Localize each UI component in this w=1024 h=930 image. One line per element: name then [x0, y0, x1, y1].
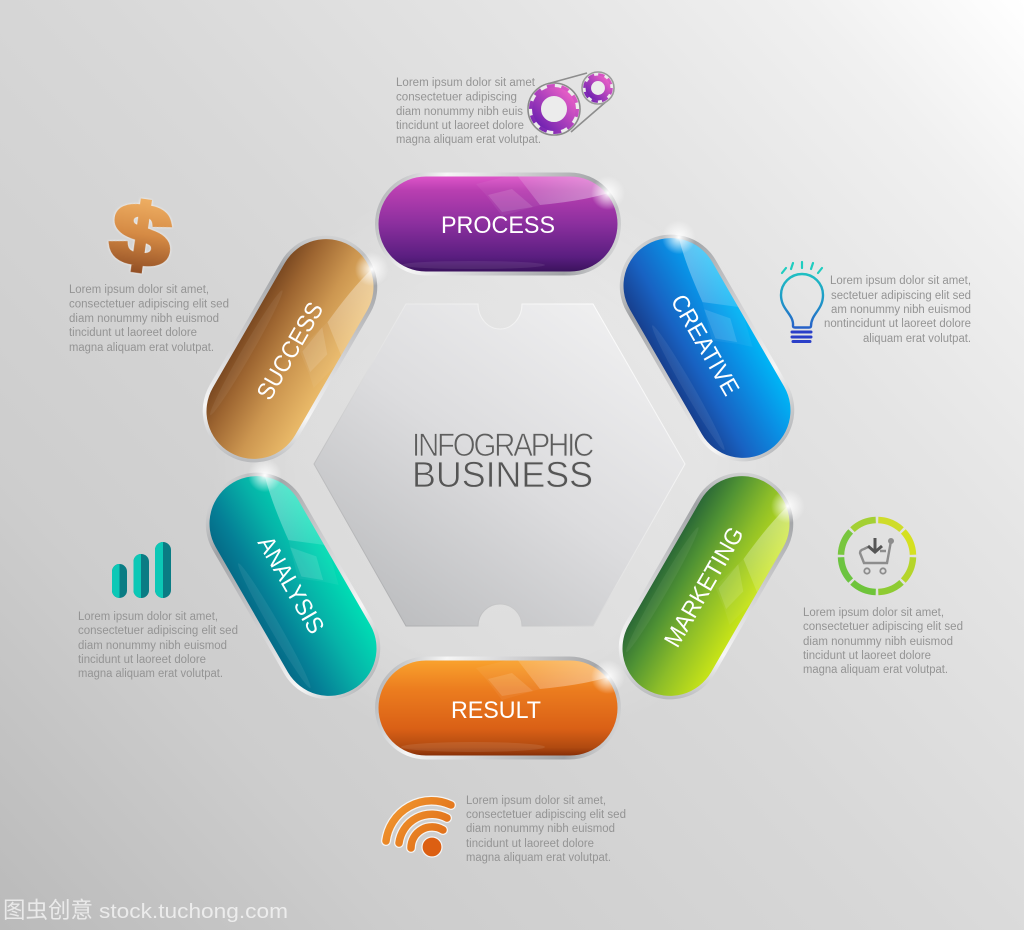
text block: analysis: magna aliquam erat volutpat. — [78, 668, 223, 680]
watermark: stock.tuchong.com — [99, 900, 288, 923]
text block: marketing: magna aliquam erat volutpat. — [803, 664, 948, 676]
text block: marketing: Lorem ipsum dolor sit amet, — [803, 607, 944, 619]
text block: analysis: tincidunt ut laoreet dolore — [78, 654, 206, 666]
label: success: SUCCESS — [252, 298, 329, 405]
icon: wifi signal — [386, 801, 451, 857]
text block: marketing: diam nonummy nibh euismod — [803, 636, 953, 648]
label: result: RESULT — [451, 697, 541, 724]
text block: marketing: tincidunt ut laoreet dolore — [803, 650, 931, 662]
watermark — [3, 898, 288, 923]
text block: creative: am nonummy nibh euismod — [831, 304, 971, 316]
text block: success: diam nonummy nibh euismod — [69, 313, 219, 325]
label: marketing: MARKETING — [659, 522, 750, 652]
text block: success: tincidunt ut laoreet dolore — [69, 327, 197, 339]
text block: creative: sectetuer adipiscing elit sed — [831, 290, 971, 302]
text block: success — [69, 284, 229, 354]
pill: success — [202, 236, 384, 462]
text block: process: magna aliquam erat volutpat. — [396, 134, 541, 146]
label: analysis: ANALYSIS — [252, 532, 329, 639]
text block: process: consectetuer adipiscing — [396, 92, 517, 104]
text block: marketing: consectetuer adipiscing elit sed — [803, 621, 963, 633]
text block: success: Lorem ipsum dolor sit amet, — [69, 284, 209, 296]
title: infographic business: INFOGRAPHIC — [412, 427, 594, 463]
title: infographic business — [412, 427, 594, 495]
text block: creative: nontincidunt ut laoreet dolore — [824, 318, 971, 330]
icon: gears — [528, 72, 614, 135]
watermark: 图虫创意 — [3, 898, 93, 923]
text block: process: diam nonummy nibh euis — [396, 106, 523, 118]
icon: bar chart — [112, 542, 171, 598]
pill: process — [375, 172, 625, 276]
text block: success: consectetuer adipiscing elit sed — [69, 298, 229, 310]
text block: process: Lorem ipsum dolor sit amet — [396, 77, 536, 89]
label: process: PROCESS — [441, 212, 555, 239]
text block: creative: aliquam erat volutpat. — [863, 333, 971, 345]
icon: light bulb — [781, 262, 823, 342]
pill: creative — [620, 226, 794, 462]
pill: marketing — [618, 472, 800, 700]
text block: result — [466, 795, 626, 864]
text block: result: consectetuer adipiscing elit sed — [466, 809, 626, 821]
label: creative: CREATIVE — [665, 290, 744, 400]
text block: analysis: diam nonummy nibh euismod — [78, 640, 227, 652]
pill: analysis — [206, 462, 380, 699]
text block: result: diam nonummy nibh euismod — [466, 823, 615, 835]
text block: analysis: consectetuer adipiscing elit sed — [78, 625, 238, 637]
text block: analysis — [78, 611, 238, 680]
pill: result — [375, 656, 625, 760]
text block: result: magna aliquam erat volutpat. — [466, 852, 611, 864]
text block: process — [396, 77, 541, 146]
icon: dollar sign: $ — [105, 185, 177, 286]
icon: cart in segmented ring — [826, 505, 928, 607]
title: infographic business: BUSINESS — [412, 454, 593, 495]
text block: creative: Lorem ipsum dolor sit amet, — [830, 275, 971, 287]
text block: result: tincidunt ut laoreet dolore — [466, 838, 594, 850]
text block: process: tincidunt ut laoreet dolore — [396, 120, 524, 132]
text block: marketing — [803, 607, 963, 676]
central hexagon — [314, 304, 685, 626]
text block: result: Lorem ipsum dolor sit amet, — [466, 795, 606, 807]
text block: creative — [824, 275, 971, 345]
text block: analysis: Lorem ipsum dolor sit amet, — [78, 611, 218, 623]
text block: success: magna aliquam erat volutpat. — [69, 342, 214, 354]
